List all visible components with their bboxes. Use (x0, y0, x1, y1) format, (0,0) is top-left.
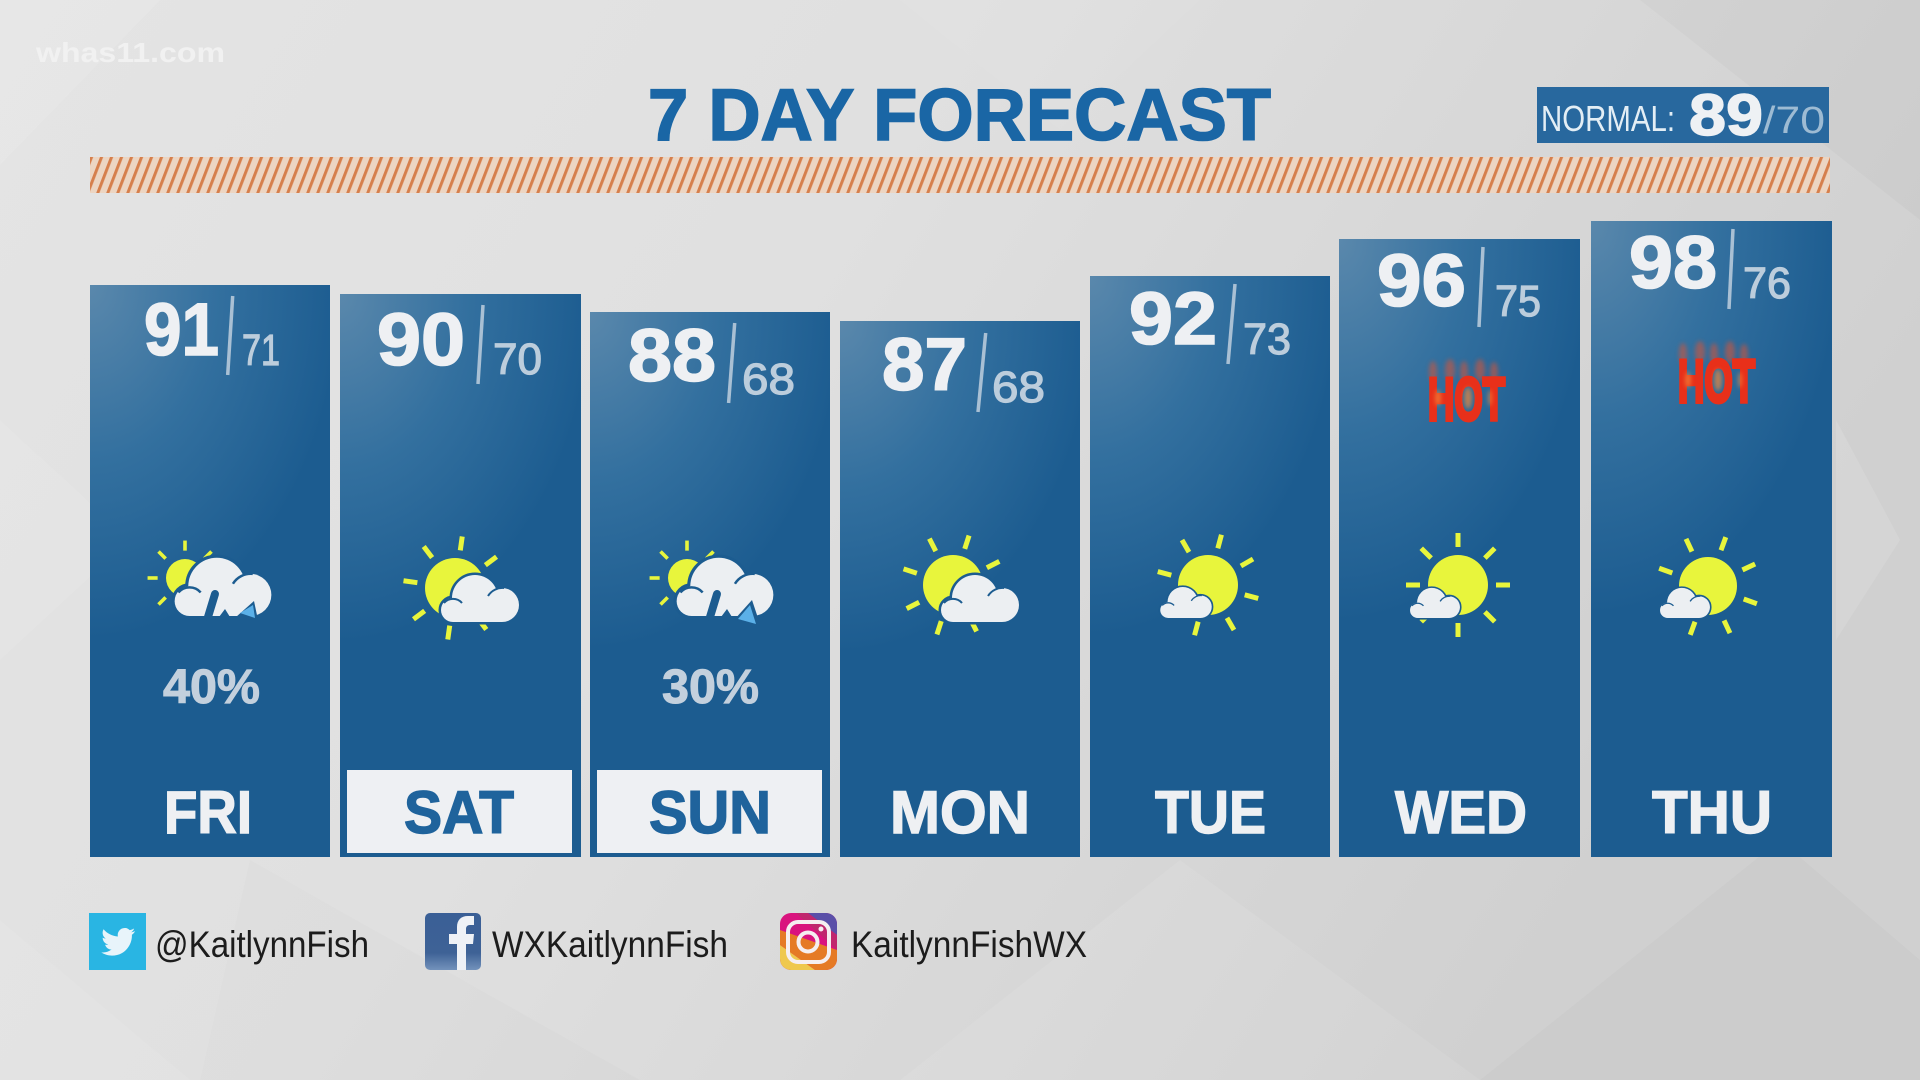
icon: instagram logo (780, 913, 837, 970)
social: instagram: KaitlynnFishWX (851, 924, 1087, 965)
weekend day label (347, 770, 572, 853)
weekend day label: SUN (649, 779, 771, 846)
icon: flaming HOT label: HOT (1678, 348, 1755, 415)
panel: Wednesday (1339, 239, 1580, 857)
social: twitter (89, 913, 369, 970)
icon: sun with storm cloud (650, 541, 773, 624)
icon: facebook logo (425, 913, 481, 970)
panel: Sunday: 88 (628, 314, 716, 397)
panel: Saturday (340, 294, 581, 857)
icon: sun with small cloud (1641, 519, 1775, 653)
normal temperature badge (1537, 83, 1829, 148)
social: twitter: @KaitlynnFish (155, 924, 369, 965)
panel: Friday: 71 (242, 326, 280, 375)
panel: Tuesday (1090, 276, 1330, 857)
panel: Friday: 40% (163, 661, 260, 714)
panel: Wednesday: WED (1395, 779, 1527, 846)
icon: flaming HOT label (1428, 359, 1505, 433)
hatched divider (90, 157, 1830, 193)
panel: Tuesday: 92 (1129, 277, 1217, 360)
panel: Thursday (1591, 221, 1832, 857)
panel: Saturday: 70 (493, 335, 542, 384)
icon: sun and cloud (396, 529, 519, 647)
icon: twitter bird (89, 913, 146, 970)
panel: Monday: 87 (882, 323, 967, 406)
panel: Tuesday: TUE (1155, 779, 1266, 846)
social: instagram (780, 913, 1087, 970)
panel: Tuesday: 73 (1243, 315, 1291, 364)
normal temperature badge: 89 (1689, 83, 1763, 148)
panel: Sunday (590, 312, 830, 857)
icon: flaming HOT label (1678, 341, 1755, 415)
panel: Friday: 91 (144, 288, 219, 371)
normal temperature badge: NORMAL: (1541, 98, 1675, 139)
panel: Friday: FRI (164, 779, 252, 846)
panel: Thursday: 76 (1743, 259, 1791, 308)
icon: sun with small cloud (1406, 533, 1510, 637)
panel: Thursday: 98 (1629, 221, 1717, 304)
icon: sun with small cloud (1144, 521, 1272, 649)
panel: Sunday: 30% (662, 661, 759, 714)
icon: flaming HOT label: HOT (1428, 366, 1505, 433)
panel: Monday: MON (890, 779, 1030, 846)
panel: Saturday: 90 (377, 298, 465, 381)
panel: Monday: 68 (992, 363, 1045, 412)
social: facebook (425, 913, 728, 970)
normal temperature badge: /70 (1763, 100, 1825, 142)
title: 7 DAY FORECAST (648, 75, 1271, 156)
panel: Wednesday: 96 (1377, 239, 1466, 322)
panel: Friday (90, 285, 330, 857)
icon: sun with storm cloud (148, 541, 271, 620)
panel: Monday (840, 321, 1080, 857)
watermark: whas11.com: whas11.com (35, 37, 225, 68)
social: facebook: WXKaitlynnFish (492, 924, 728, 965)
panel: Sunday: 68 (742, 355, 795, 404)
weekend day label: SAT (404, 779, 514, 846)
icon: sun and cloud (887, 519, 1019, 651)
panel: Thursday: THU (1652, 779, 1772, 846)
weekend day label (597, 770, 822, 853)
panel: Wednesday: 75 (1495, 277, 1541, 326)
